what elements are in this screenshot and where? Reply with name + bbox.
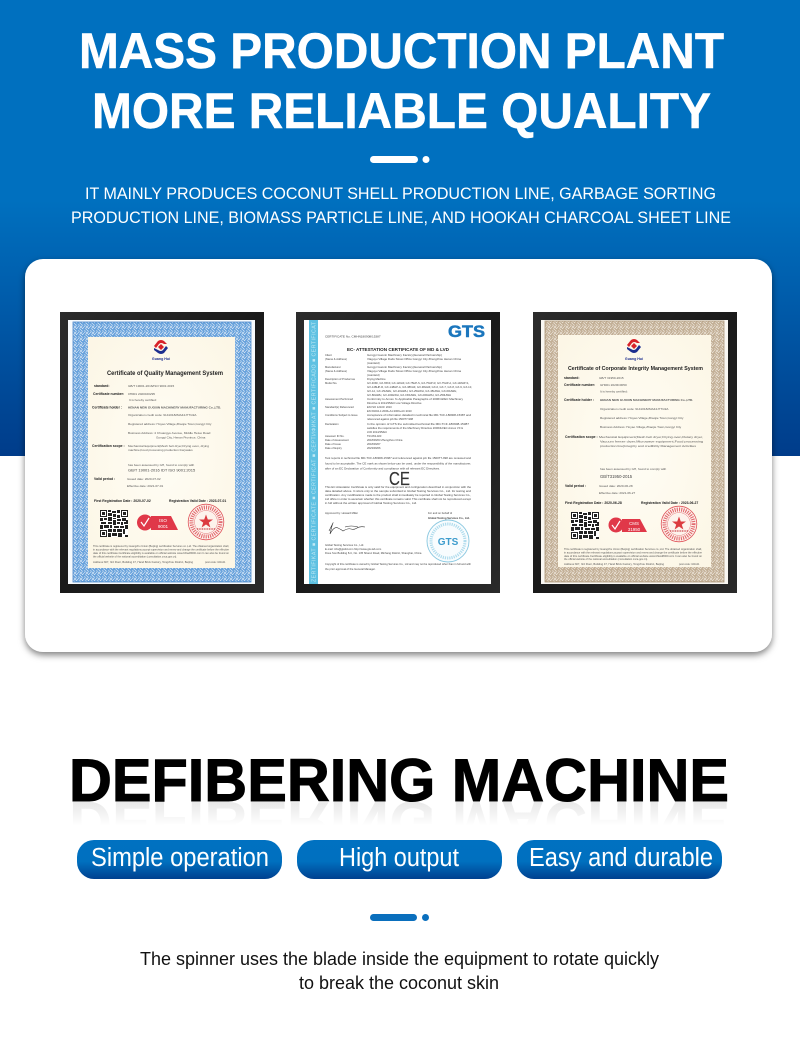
certificate: quality management system: First Registration Date : 2020-07-02 — [94, 499, 151, 503]
certificate: ec attestation of md and lvd: the prior approval of the General Manager. — [325, 567, 376, 571]
certificate: ec attestation of md and lvd: Date of Expiry — [325, 446, 343, 450]
certificate: quality management system: Certificate of Quality Management System — [107, 371, 223, 377]
certificate: corporate integrity management system: Certification scope : — [565, 435, 598, 439]
badge: iso 9001: ISO — [159, 518, 167, 523]
certificate: corporate integrity management system: GH001 2020C0050 — [600, 383, 627, 387]
feature pill: high output — [297, 840, 502, 879]
certificate: ec attestation of md and lvd: LVD 2014/35/EU — [367, 430, 387, 434]
description text — [140, 949, 659, 993]
feature pill: easy and durable — [517, 840, 722, 879]
certificate: quality management system: machine,Food processing production line)sales — [128, 448, 193, 452]
certificate: quality management system: standard: — [94, 384, 109, 388]
title: mass production plant, more reliable quality: MORE RELIABLE QUALITY — [92, 83, 711, 139]
certificate: quality management system: Valid period : — [94, 477, 115, 481]
certificate: quality management system: 0H001 20200J0295 — [128, 392, 155, 396]
certificate: ec attestation of md and lvd: GX-80HWH, GX-100HWH, GX-150HWH, GX-200HWH, GX-250HWH — [367, 393, 451, 397]
certificate: quality management system: Mechanical Equipment(Mesh belt dryer,Drying oven, drying — [128, 444, 209, 448]
certificate: ec attestation of md and lvd: (Name & Address) — [325, 369, 347, 373]
certificate: quality management system: Gongyi City, Henan Province, China — [156, 436, 206, 440]
certificate: quality management system: Certification scope : — [92, 444, 125, 448]
certificate: ec attestation of md and lvd: after of an EC Declaration of Conformity and compliance with all relevant EC Directives. — [325, 466, 440, 470]
certificate: ec attestation of md and lvd: (mainland) — [367, 373, 380, 377]
certificate: ec attestation of md and lvd: CE — [389, 469, 410, 489]
divider: white bar and dot — [370, 156, 430, 163]
certificate: ec attestation of md and lvd: Dove Son Building 8-C, No. 135 Shanxi Road, Minhang District, Shanghai, China — [325, 551, 422, 555]
certificate: ec attestation of md and lvd: For and on behalf of — [428, 511, 452, 515]
certificate: ec attestation of md and lvd: GX-148HP-R, GX-148HP-A, GX-38KHF, GX-38HHF, GX-6, GX-7, GX-8, GX-9, GX-10, — [367, 385, 472, 389]
certificate: ec attestation of md and lvd: satisfies the requirements of the Machinery Directive 2006/42/EC Annex VII & — [367, 426, 463, 430]
certificate: ec attestation of md and lvd: certification. Any modifications made to the product shall immediately be reported to Global Testing Services Co., — [325, 493, 471, 497]
certificate: ec attestation of md and lvd: 2018/09/03 Zhengzhou China — [367, 438, 403, 442]
certificate: quality management system: It is hereby certified: — [129, 398, 157, 402]
certificate: quality management system: HENAN NEW GUOXIN MACHINERY MANUFACTURING Co.,LTD. — [128, 406, 221, 410]
certificate: corporate integrity management system: in accordance with the relevant regulations,accept supervision and renew and change the certificate before the effective — [564, 552, 703, 554]
certificate: corporate integrity management system: Issued date: 2020-06-28 — [599, 484, 633, 488]
certificate: quality management system: Effective date: 2021-07-01 — [127, 484, 164, 488]
certificate: ec attestation of md and lvd: Model No. — [325, 381, 338, 385]
certificate: quality management system: Issued date: 2020-07-02 — [127, 477, 161, 481]
certificate: ec attestation of md and lvd: Assessment Performed — [325, 397, 353, 401]
certificate: ec attestation of md and lvd: EN ISO 12100: 2010 — [367, 405, 392, 409]
certificate: ec attestation of md and lvd: ZERTIFIKAT ■ CERTIFICATE ■ CERTIFICAT ■ CEPTИФИKAT ■ CERTIFICADO ■ CERTIFICAT — [312, 321, 318, 582]
certificate: corporate integrity management system: production line)Integrity and credibility Management Activities — [600, 444, 697, 448]
certificate: corporate integrity management system: GB/T 31950-2015 — [599, 376, 624, 380]
stamp: gts: GTS — [438, 537, 459, 548]
certificate: ec attestation of md and lvd: In the opinion of GTS the submitted technical file MD-TCF-180908-15387 — [367, 422, 470, 426]
subtitle text — [71, 185, 731, 227]
title: mass production plant, more reliable quality — [79, 23, 724, 139]
certificate: corporate integrity management system: Guang Hui — [625, 357, 643, 361]
certificate: ec attestation of md and lvd: Date of Issue — [325, 442, 341, 446]
certificate: ec attestation of md and lvd: Ltd office in order to ascertain whether this certificate remains valid. This certificate shall not be reproduced except — [325, 497, 471, 501]
certificate: ec attestation of md and lvd: Assessor ID No. — [325, 434, 345, 438]
badge: cms 31950: CMS — [629, 521, 639, 526]
certificate: corporate integrity management system: Valid period : — [565, 484, 586, 488]
certificate: quality management system: date of this certificate.Certificate eligibility is available on official website www.bhiwd8000.com It can also be found on — [93, 552, 230, 555]
certificate: corporate integrity management system: has been assessed by GH, found to comply with — [600, 467, 666, 471]
feature pill: simple operation — [77, 840, 282, 879]
certificate: ec attestation of md and lvd: TR-063-023 — [367, 434, 382, 438]
certificate: ec attestation of md and lvd: referenced against job file 1500T7-998 — [367, 417, 414, 421]
certificate: ec attestation of md and lvd: Standard(s) Referenced — [325, 405, 354, 409]
certificate: quality management system: GB/T 19001-2016/ISO 9001:2015 — [128, 384, 174, 388]
certificate: quality management system — [60, 312, 264, 593]
certificate: corporate integrity management system: standard: — [564, 376, 579, 380]
certificate: corporate integrity management system: date of this certificate.Certificate eligibility is available on official website www.bhiwd8000.com It can also be found on — [564, 555, 703, 558]
badge: iso 9001 — [137, 514, 178, 530]
certificate: ec attestation of md and lvd: Gongyi Guoxin Machinery Factory(General Partnership) — [367, 353, 442, 357]
panel: certificates card — [25, 259, 772, 652]
feature pill: simple operation: Simple operation — [91, 844, 269, 872]
certificate: ec attestation of md and lvd: EN 60204-1:2006+A1:2009+AC:2010 — [367, 409, 412, 413]
badge: cms 31950: 31950 — [628, 527, 641, 532]
certificate: quality management system: GB/T 19001-2016 IDT ISO 9001:2015 — [128, 468, 196, 472]
certificate: corporate integrity management system: It is hereby certified: — [600, 390, 628, 394]
certificate: quality management system: in accordance with the relevant regulations,accept supervision and renew and change the certificate before the effective — [93, 548, 230, 552]
certificate: ec attestation of md and lvd: GX-12, GX-15HWH, GX-20HWH, GX-25HWH, GX-45HWH, GX-60HWH, — [367, 389, 457, 393]
certificate: ec attestation of md and lvd: EC- ATTESTATION CERTIFICATE OF MD & LVD — [347, 347, 449, 352]
certificate: ec attestation of md and lvd: Vlaguyu Village Dudu Street Office Gongyi City Zhengzhou Henan China — [367, 369, 462, 373]
certificate: corporate integrity management system: Certificate of Corporate Integrity Management System — [568, 366, 703, 372]
certificate: quality management system: Certificate number: — [93, 392, 124, 396]
certificate: ec attestation of md and lvd: Directive & 2014/35/EU Low Voltage Directive — [367, 401, 422, 405]
signature — [329, 523, 365, 534]
certificate: ec attestation of md and lvd: Copyright of this certificate is owned by Global Testing Services Co., Ltd and may not be reproduced other than in full and with — [325, 562, 471, 566]
certificate: ec attestation of md and lvd: Date of Assessment — [325, 438, 349, 442]
certificate: corporate integrity management system — [533, 312, 737, 593]
heading: defibering machine: DEFIBERING MACHINE — [69, 747, 729, 814]
certificate: corporate integrity management system: First Registration Date : 2020-06-28 — [565, 501, 622, 505]
certificate: ec attestation of md and lvd: (Name & Address) — [325, 357, 347, 361]
certificate: corporate integrity management system: Business Address: Hoyao Village,Zhaojie Town,Gongyi City — [600, 425, 682, 429]
certificate: quality management system: Organization credit code: 91410182MA44J7TG9A — [128, 413, 197, 417]
certificate: corporate integrity management system: post code: 101121 — [679, 563, 700, 566]
certificate: quality management system: the official website of the national accreditation (consultation.cnca.gov.cn). — [93, 556, 177, 558]
stamp: gts — [427, 520, 469, 562]
certificate: ec attestation of md and lvd: data detailed above. It refers only to the sample submitted to Global Testing Services Co., Ltd. for testing and — [325, 489, 472, 493]
certificate: quality management system: This certificate is registered by Guangzhu Union (Beijing) certification Services co.,Ltd. The obtained organization shall, — [93, 545, 229, 548]
certificate: ec attestation of md and lvd: Gongyi Guoxin Machinery Factory(General Partnership) — [367, 365, 442, 369]
certificate: corporate integrity management system: Registered address: Hoyao Village,Zhaojie Town,Gongyi City — [600, 416, 684, 420]
certificate: corporate integrity management system: This certificate is registered by Guangzhu Union (Beijing) certification Services co.,Ltd. The obtained organization shall, — [564, 548, 702, 551]
heading reflection: DEFIBERING MACHINE — [69, 789, 729, 856]
certificate: quality management system: has been assessed by GH, found to comply with — [128, 463, 194, 467]
certificate: ec attestation of md and lvd: Client — [325, 353, 332, 357]
divider: blue bar and dot — [370, 914, 429, 921]
certificate: ec attestation of md and lvd: found to be acceptable. The CE mark as shown below can be used, under the responsibility of the manufacturer, — [325, 462, 471, 466]
certificate: ec attestation of md and lvd: Drying Machine — [367, 377, 386, 381]
certificate: corporate integrity management system: Registration Valid Date : 2023-06-27 — [641, 501, 698, 505]
certificate: ec attestation of md and lvd: Acceptance of information detailed in technical file MD-TCF-180908-15387 and — [367, 413, 472, 417]
feature pill: easy and durable: Easy and durable — [529, 844, 713, 872]
certificate: corporate integrity management system: HENAN NEW GUOXIN MACHINERY MANUFACTURING Co.,LTD. — [600, 398, 693, 402]
certificate: ec attestation of md and lvd: Test reports in technical file MD-TCF-180908-15387 and referenced against job file 1500T7-998 are reviewed and — [325, 456, 471, 460]
feature pill: high output: High output — [339, 844, 459, 872]
certificate: quality management system: Business Address: 4 Chuangye Avenue, Middle Hetuo Road — [128, 431, 211, 435]
certificate: ec attestation of md and lvd: Declaration — [325, 422, 339, 426]
certificate: quality management system: Registration Valid Date : 2023-07-01 — [169, 499, 226, 503]
certificate: quality management system: Guang Hui — [152, 357, 170, 361]
certificate: ec attestation of md and lvd: CERTIFICATE No. CMHN180908/15387 — [325, 334, 381, 338]
badge: iso 9001: 9001 — [158, 524, 169, 529]
subtitle text: PRODUCTION LINE, BIOMASS PARTICLE LINE, AND HOOKAH CHARCOAL SHEET LINE — [71, 209, 731, 227]
certificate: ec attestation of md and lvd: Conditions Subject to Issue — [325, 413, 358, 417]
certificate: quality management system: Certificate holder : — [92, 406, 122, 410]
certificate: ec attestation of md and lvd: GX-30KF, GX-65KF, GX-120HF, GX-75HP-S, GX-75HP-R, GX-75HP-A, GX-148HP-S, — [367, 381, 469, 385]
certificate: ec attestation of md and lvd — [296, 312, 500, 593]
certificate: quality management system: post code: 101121 — [205, 561, 226, 564]
title: mass production plant, more reliable quality: MASS PRODUCTION PLANT — [79, 23, 724, 79]
certificate: corporate integrity management system: Mechanical Equipment(Mesh belt dryer,Drying oven,Rotary dryer, — [599, 435, 703, 439]
certificate: corporate integrity management system: Certificate holder : — [564, 398, 594, 402]
certificate: ec attestation of md and lvd: 2018/09/07 — [367, 442, 381, 446]
certificate: corporate integrity management system: Effective date: 2021-06-27 — [599, 491, 636, 495]
certificate: quality management system: Registered address: Hoyao Village,Zhaojie Town,Gongyi City — [128, 422, 212, 426]
certificate: corporate integrity management system: Address:307, 3rd Floor, Building 47, Hand Brick Factory, Tongzhou District, Beijing — [564, 563, 665, 566]
certificate: corporate integrity management system: Organization credit code: 91410182MA44J7TG9A — [600, 407, 669, 411]
certificate: ec attestation of md and lvd: Vlaguyu Village Dudu Street Office Gongyi City Zhengzhou Henan China — [367, 357, 462, 361]
certificate: ec attestation of md and lvd: (mainland) — [367, 361, 380, 365]
certificate: ec attestation of md and lvd: Global Testing Services Co., Ltd. — [428, 516, 470, 520]
certificate: ec attestation of md and lvd: This EC Attestation Certificate is only valid for the equipment and configuration described in conjunction with the — [325, 485, 472, 489]
certificate: ec attestation of md and lvd: Conformity to Annex I's Applicable Paragraphs of 2006/42/EC Machinery — [367, 397, 464, 401]
description text: to break the coconut skin — [299, 973, 499, 993]
certificate: ec attestation of md and lvd: GTS — [448, 323, 485, 341]
certificate: quality management system: Address:307, 3rd Floor, Building 47, Hand Brick Factory, Tongzhou District, Beijing — [93, 561, 194, 564]
description text: The spinner uses the blade inside the equipment to rotate quickly — [140, 949, 659, 969]
certificate: corporate integrity management system: Vacuum freeze dryer,Microwave equipment,Food processing — [600, 440, 703, 444]
certificate: ec attestation of md and lvd: Description of Product as — [325, 377, 356, 381]
certificate: corporate integrity management system: Certificate number: — [564, 383, 595, 387]
certificate: ec attestation of md and lvd: E-mail: info@gtsltd.com http://www.gts-lab.com — [325, 547, 382, 551]
subtitle text: IT MAINLY PRODUCES COCONUT SHELL PRODUCTION LINE, GARBAGE SORTING — [85, 185, 716, 203]
certificate: ec attestation of md and lvd: in full without the written approval of Global Testing Services Co., Ltd. — [325, 501, 417, 505]
certificate: ec attestation of md and lvd: 2023/09/06 — [367, 446, 381, 450]
certificate: corporate integrity management system: GB/T31950-2015 — [600, 474, 633, 479]
certificate: corporate integrity management system: the official website of the national accreditation (consultation.cnca.gov.cn). — [564, 558, 648, 561]
certificate: ec attestation of md and lvd: Global Testing Services Co., Ltd. — [325, 543, 364, 547]
certificate: ec attestation of md and lvd: Approved by: Howard Miller — [325, 511, 358, 515]
badge: cms 31950 — [608, 518, 647, 532]
blue header background — [0, 0, 800, 456]
certificate: ec attestation of md and lvd: Manufacturer — [325, 365, 341, 369]
